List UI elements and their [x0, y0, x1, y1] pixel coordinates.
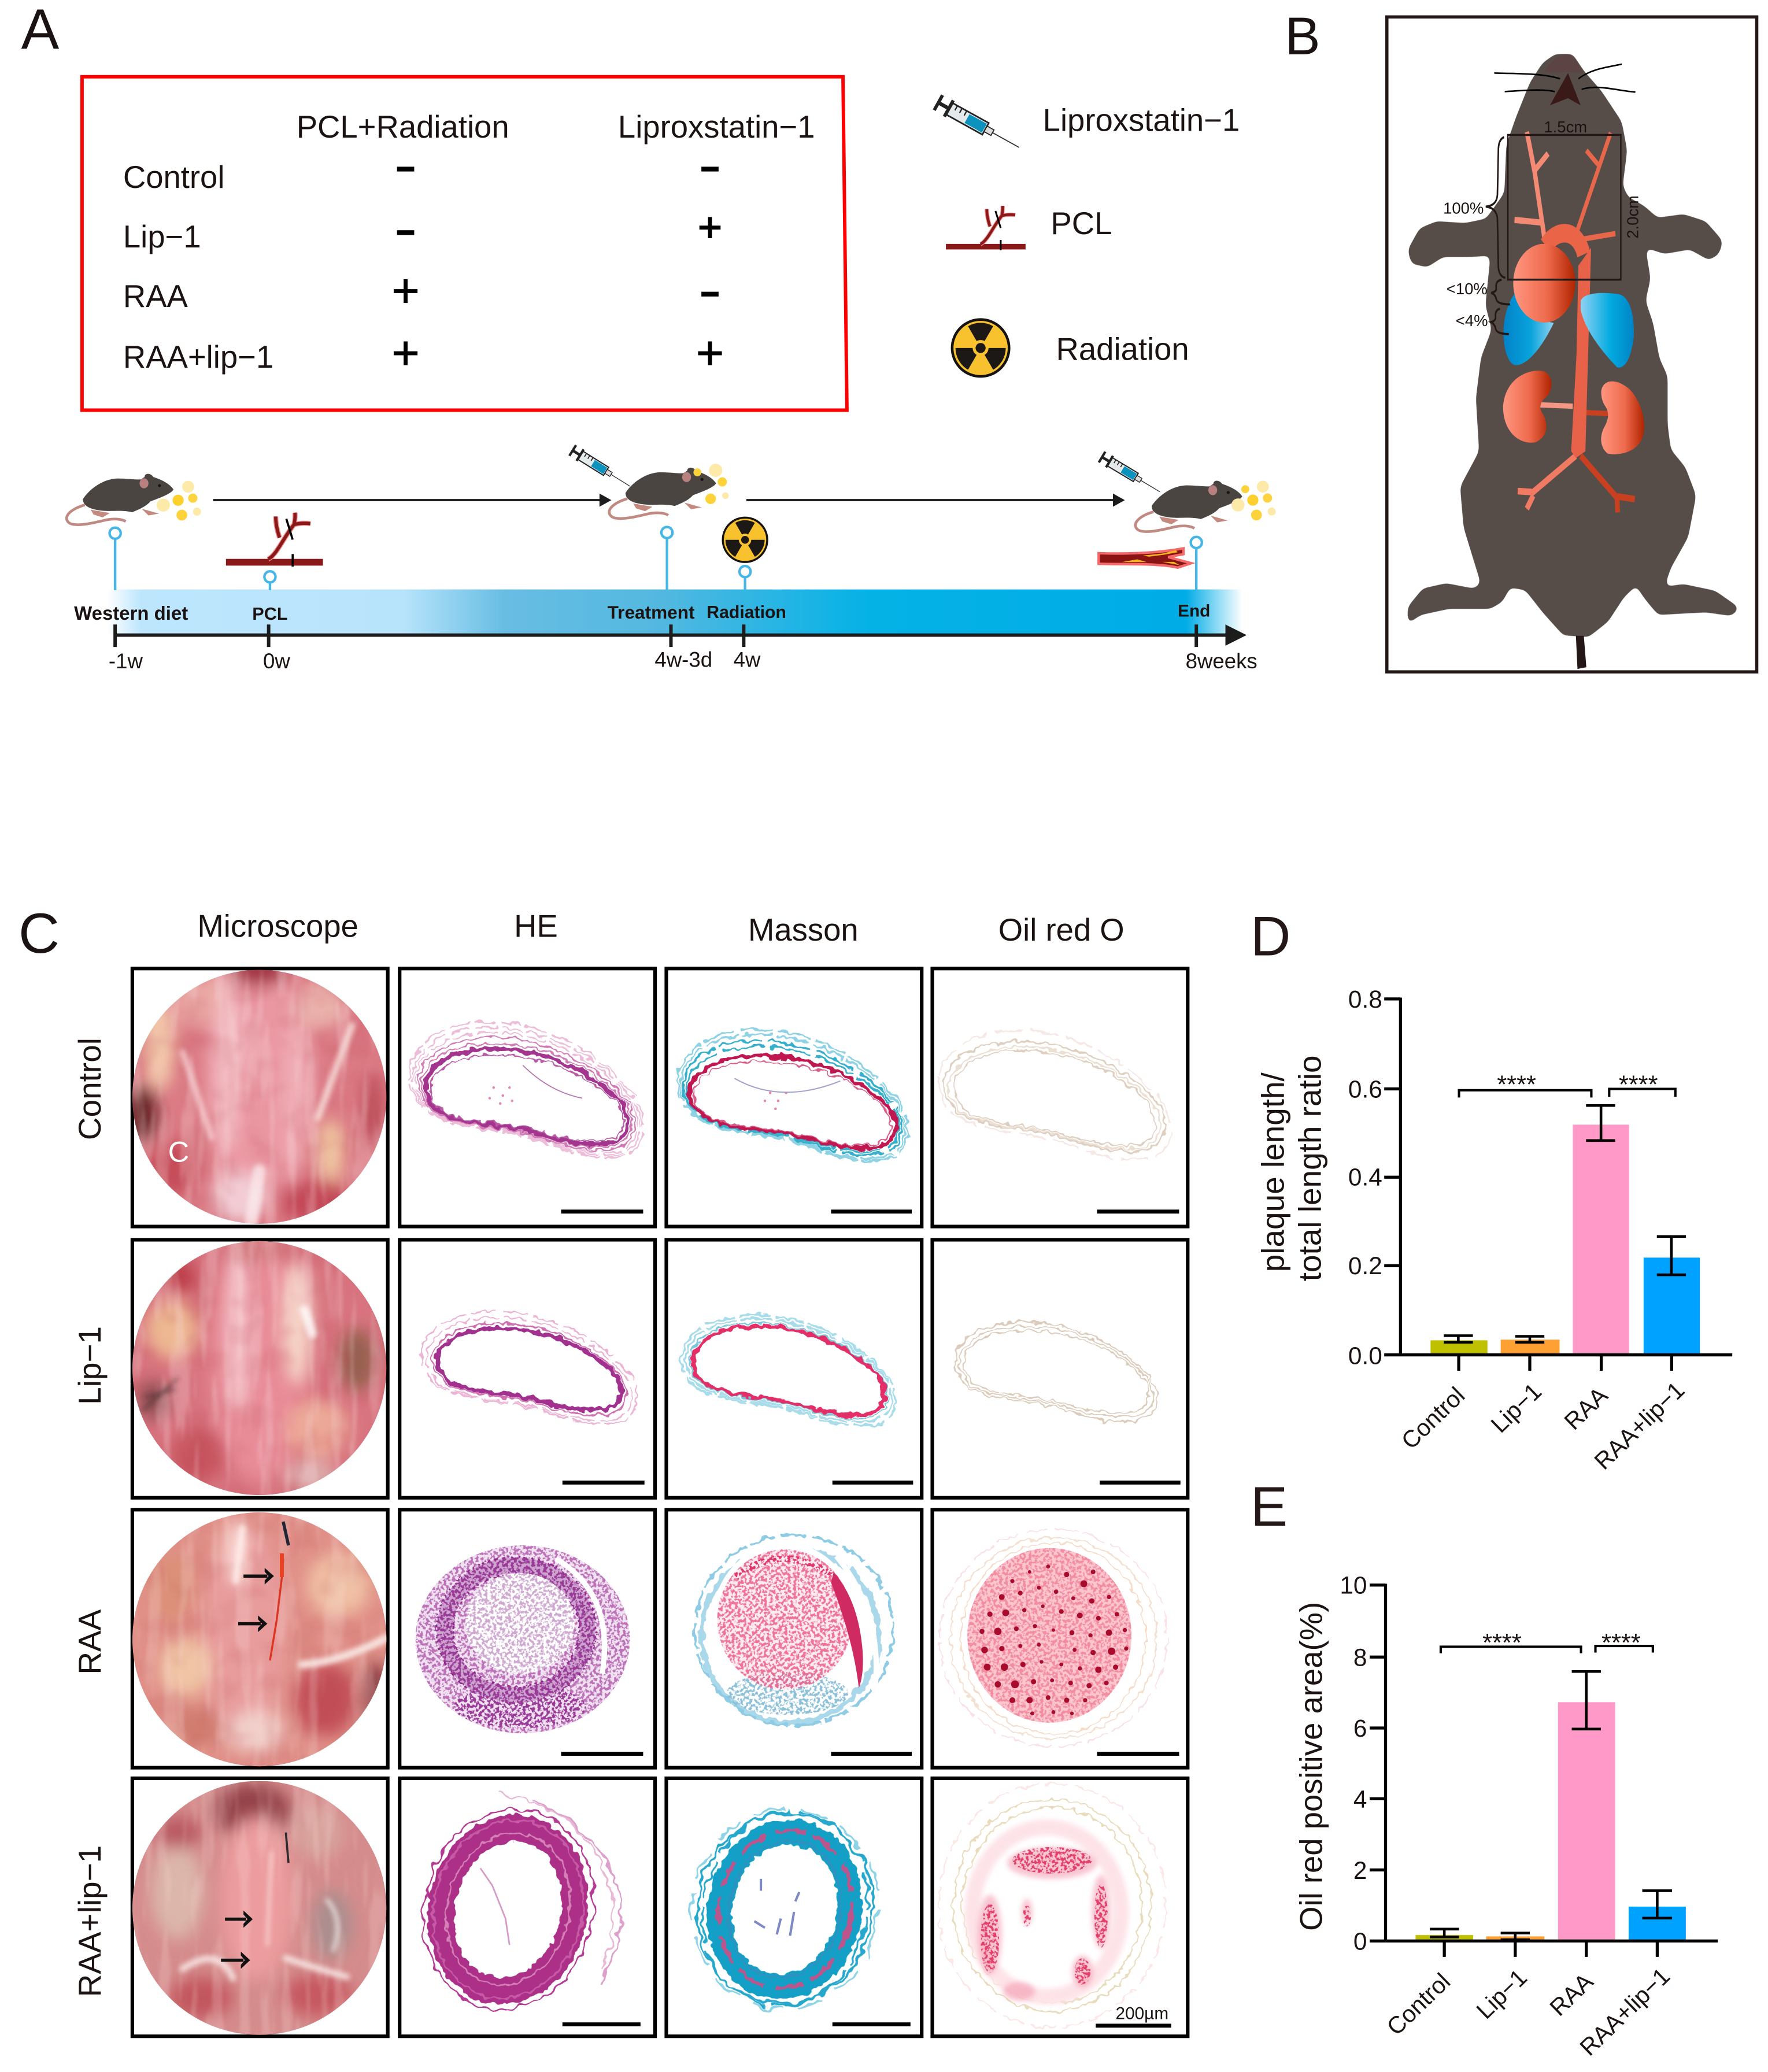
- axes and ticks: [1384, 998, 1732, 1371]
- error bars: [1444, 1105, 1686, 1342]
- significance stars: ****: [1601, 1629, 1641, 1657]
- anatomy measurement labels: <10%: [1447, 280, 1488, 298]
- micrograph: Lip-1 Masson: [682, 1315, 896, 1426]
- legend: PCL ligation: [946, 206, 1112, 250]
- y tick labels: 0.8: [1348, 986, 1382, 1013]
- x category labels: RAA: [1545, 1968, 1599, 2021]
- panel label C: C: [19, 901, 60, 965]
- icon: treated mouse with syringe: [568, 444, 729, 519]
- bars: [1415, 1702, 1686, 1941]
- icon: mouse on western diet: [66, 474, 201, 525]
- photo: Lip-1 microscope: [132, 1230, 386, 1495]
- y tick labels: 2: [1353, 1857, 1367, 1884]
- micrograph: Lip-1 HE: [421, 1311, 637, 1424]
- row labels: Lip−1: [72, 1326, 108, 1405]
- time tick labels: [109, 648, 1257, 673]
- micrograph: RAA HE: [416, 1545, 630, 1733]
- significance stars: ****: [1482, 1629, 1522, 1657]
- significance stars: ****: [1619, 1071, 1658, 1098]
- row labels: RAA: [123, 279, 188, 314]
- braces: [1486, 137, 1510, 334]
- measurement box: [1508, 135, 1621, 280]
- time tick labels: 4w: [734, 648, 761, 671]
- timeline stage labels: Western diet: [74, 602, 188, 624]
- scale label: 200µm: [1116, 2004, 1168, 2023]
- panel label D: D: [1251, 905, 1290, 967]
- icon: final mouse with syringe: [1097, 451, 1276, 532]
- lumen debris: [754, 1879, 800, 1936]
- timeline: [66, 444, 1276, 673]
- anatomy measurement labels: <4%: [1456, 312, 1488, 330]
- significance stars: ****: [1497, 1071, 1536, 1098]
- lipid patches: [978, 1847, 1110, 2000]
- heart: [1513, 244, 1575, 323]
- whiskers: [1495, 64, 1636, 92]
- x category labels: RAA+lip−1: [1575, 1963, 1675, 2061]
- lumen debris: [489, 1065, 582, 1105]
- lungs: [1504, 294, 1554, 365]
- micrograph: Control Oil red O: [939, 1031, 1171, 1159]
- legend: Radiation: Radiation: [1056, 332, 1189, 367]
- y tick labels: 0: [1353, 1927, 1367, 1955]
- photo: RAA microscope: [132, 1512, 392, 1766]
- micrograph: RAA+lip-1 Oil red O: [938, 1784, 1166, 2027]
- micrograph: Lip-1 Oil red O: [955, 1322, 1157, 1422]
- timeline gradient band: [107, 590, 1242, 634]
- timeline stage labels: End: [1178, 602, 1210, 621]
- y tick labels: 4: [1353, 1785, 1367, 1812]
- x category labels: RAA: [1559, 1382, 1613, 1435]
- column headings: Microscope: [197, 908, 358, 944]
- photo: Control microscope: [128, 959, 386, 1224]
- legend: PCL ligation: PCL: [1051, 206, 1112, 241]
- x category labels: Lip−1: [1471, 1964, 1532, 2024]
- time tick labels: -1w: [109, 649, 143, 673]
- chart: plaque length ratio: [1255, 986, 1732, 1475]
- lumen gap crescent: [556, 1559, 605, 1674]
- y tick labels: 0.0: [1348, 1342, 1382, 1370]
- micrograph: RAA Masson: [695, 1535, 893, 1725]
- x category labels: Control: [1396, 1382, 1470, 1455]
- column headings: Liproxstatin−1: [618, 109, 815, 145]
- row labels: RAA: [72, 1609, 108, 1675]
- column headings: PCL+Radiation: [297, 109, 509, 145]
- y tick labels: 10: [1340, 1572, 1367, 1599]
- micrograph: RAA+lip-1 Masson: [673, 1792, 896, 2027]
- panel frames grid: [132, 968, 1188, 2036]
- y tick labels: 0.6: [1348, 1075, 1382, 1102]
- y axis title: [1255, 1055, 1327, 1281]
- legend: Liproxstatin-1 syringe: Liproxstatin−1: [1043, 103, 1240, 138]
- pin markers: [110, 527, 1202, 590]
- timeline stage labels: [74, 602, 1210, 624]
- y tick labels: [1348, 986, 1382, 1370]
- x category labels: [1382, 1963, 1675, 2061]
- arrows on photo: [238, 1568, 274, 1632]
- kidneys: [1503, 371, 1551, 443]
- significance stars: [1482, 1629, 1641, 1657]
- column headings: [297, 109, 815, 145]
- column headings: HE: [514, 908, 558, 944]
- legend: Liproxstatin-1 syringe: [933, 94, 1240, 156]
- significance brackets: [1459, 1089, 1675, 1097]
- micrograph: RAA+lip-1 HE: [402, 1791, 621, 2027]
- row labels: Lip−1: [123, 219, 201, 254]
- micrograph: RAA Oil red O: [940, 1530, 1167, 1747]
- anatomy measurement labels: 2.0cm: [1624, 195, 1642, 239]
- lumen debris: [734, 1078, 840, 1110]
- micrograph: Control Masson: [678, 1029, 908, 1161]
- y tick labels: 0.2: [1348, 1252, 1382, 1279]
- y axis title: Oil red positive area(%): [1294, 1602, 1329, 1931]
- y axis title: total length ratio: [1292, 1055, 1327, 1281]
- timeline stage labels: PCL: [252, 604, 288, 624]
- error bars: [1430, 1671, 1672, 1940]
- icon: plaque-bearing artery: [1098, 549, 1191, 568]
- column headings: [197, 908, 1125, 948]
- mouse body silhouette: [1408, 54, 1740, 637]
- y tick labels: 0.4: [1348, 1164, 1382, 1191]
- time tick labels: 4w-3d: [654, 648, 712, 671]
- time tick labels: 0w: [263, 649, 290, 673]
- lipid droplets: [979, 1564, 1129, 1715]
- y axis title: plaque length/: [1255, 1072, 1290, 1272]
- panel: treatment groups table: [82, 77, 847, 410]
- white gap crescent: [837, 1556, 876, 1691]
- x category labels: RAA+lip−1: [1589, 1377, 1689, 1475]
- icon: radiation on timeline: [723, 517, 767, 562]
- plus and minus marks: [394, 166, 722, 365]
- x category labels: [1396, 1377, 1689, 1475]
- y tick labels: [1340, 1572, 1367, 1955]
- x category labels: Control: [1382, 1968, 1455, 2040]
- bars: [1430, 1124, 1700, 1355]
- photo annotation: C: [168, 1135, 189, 1168]
- x category labels: Lip−1: [1486, 1378, 1547, 1438]
- y tick labels: 6: [1353, 1715, 1367, 1742]
- panel label E: E: [1251, 1476, 1288, 1538]
- column headings: Oil red O: [998, 912, 1125, 948]
- chart: oil red positive area: [1294, 1572, 1718, 2061]
- legend: Radiation: [952, 320, 1189, 376]
- column headings: Masson: [748, 912, 859, 948]
- time tick labels: 8weeks: [1186, 649, 1257, 673]
- row labels: Control: [123, 160, 224, 195]
- scale bars: [561, 1209, 1181, 2027]
- tail: [1576, 636, 1586, 669]
- time axis arrow: [115, 624, 1228, 647]
- row labels: RAA+lip−1: [72, 1845, 108, 1997]
- anatomy measurement labels: [1443, 118, 1642, 330]
- significance stars: [1497, 1071, 1658, 1098]
- panel label B: B: [1285, 7, 1321, 66]
- nose and snout: [1544, 54, 1584, 72]
- row labels: Control: [72, 1038, 108, 1140]
- timeline stage labels: Treatment: [608, 602, 695, 623]
- anatomy measurement labels: 100%: [1443, 199, 1484, 217]
- timeline stage labels: Radiation: [707, 603, 786, 622]
- icon: PCL surgery: [226, 513, 323, 567]
- panel: mouse anatomy diagram: [1387, 17, 1757, 672]
- axes and ticks: [1370, 1583, 1718, 1957]
- arrows between stages: [213, 494, 1125, 507]
- arteries: [1515, 132, 1635, 512]
- anatomy measurement labels: 1.5cm: [1544, 118, 1587, 136]
- lumen debris: [480, 1868, 509, 1945]
- photo: RAA+lip-1 microscope: [132, 1781, 386, 2035]
- micrograph: Control HE: [410, 1022, 643, 1157]
- arrows on photo: [221, 1911, 253, 1969]
- row labels: [123, 160, 273, 375]
- row labels: [72, 1038, 108, 1997]
- significance brackets: [1441, 1646, 1653, 1653]
- row labels: RAA+lip−1: [123, 339, 273, 375]
- y tick labels: 8: [1353, 1644, 1367, 1671]
